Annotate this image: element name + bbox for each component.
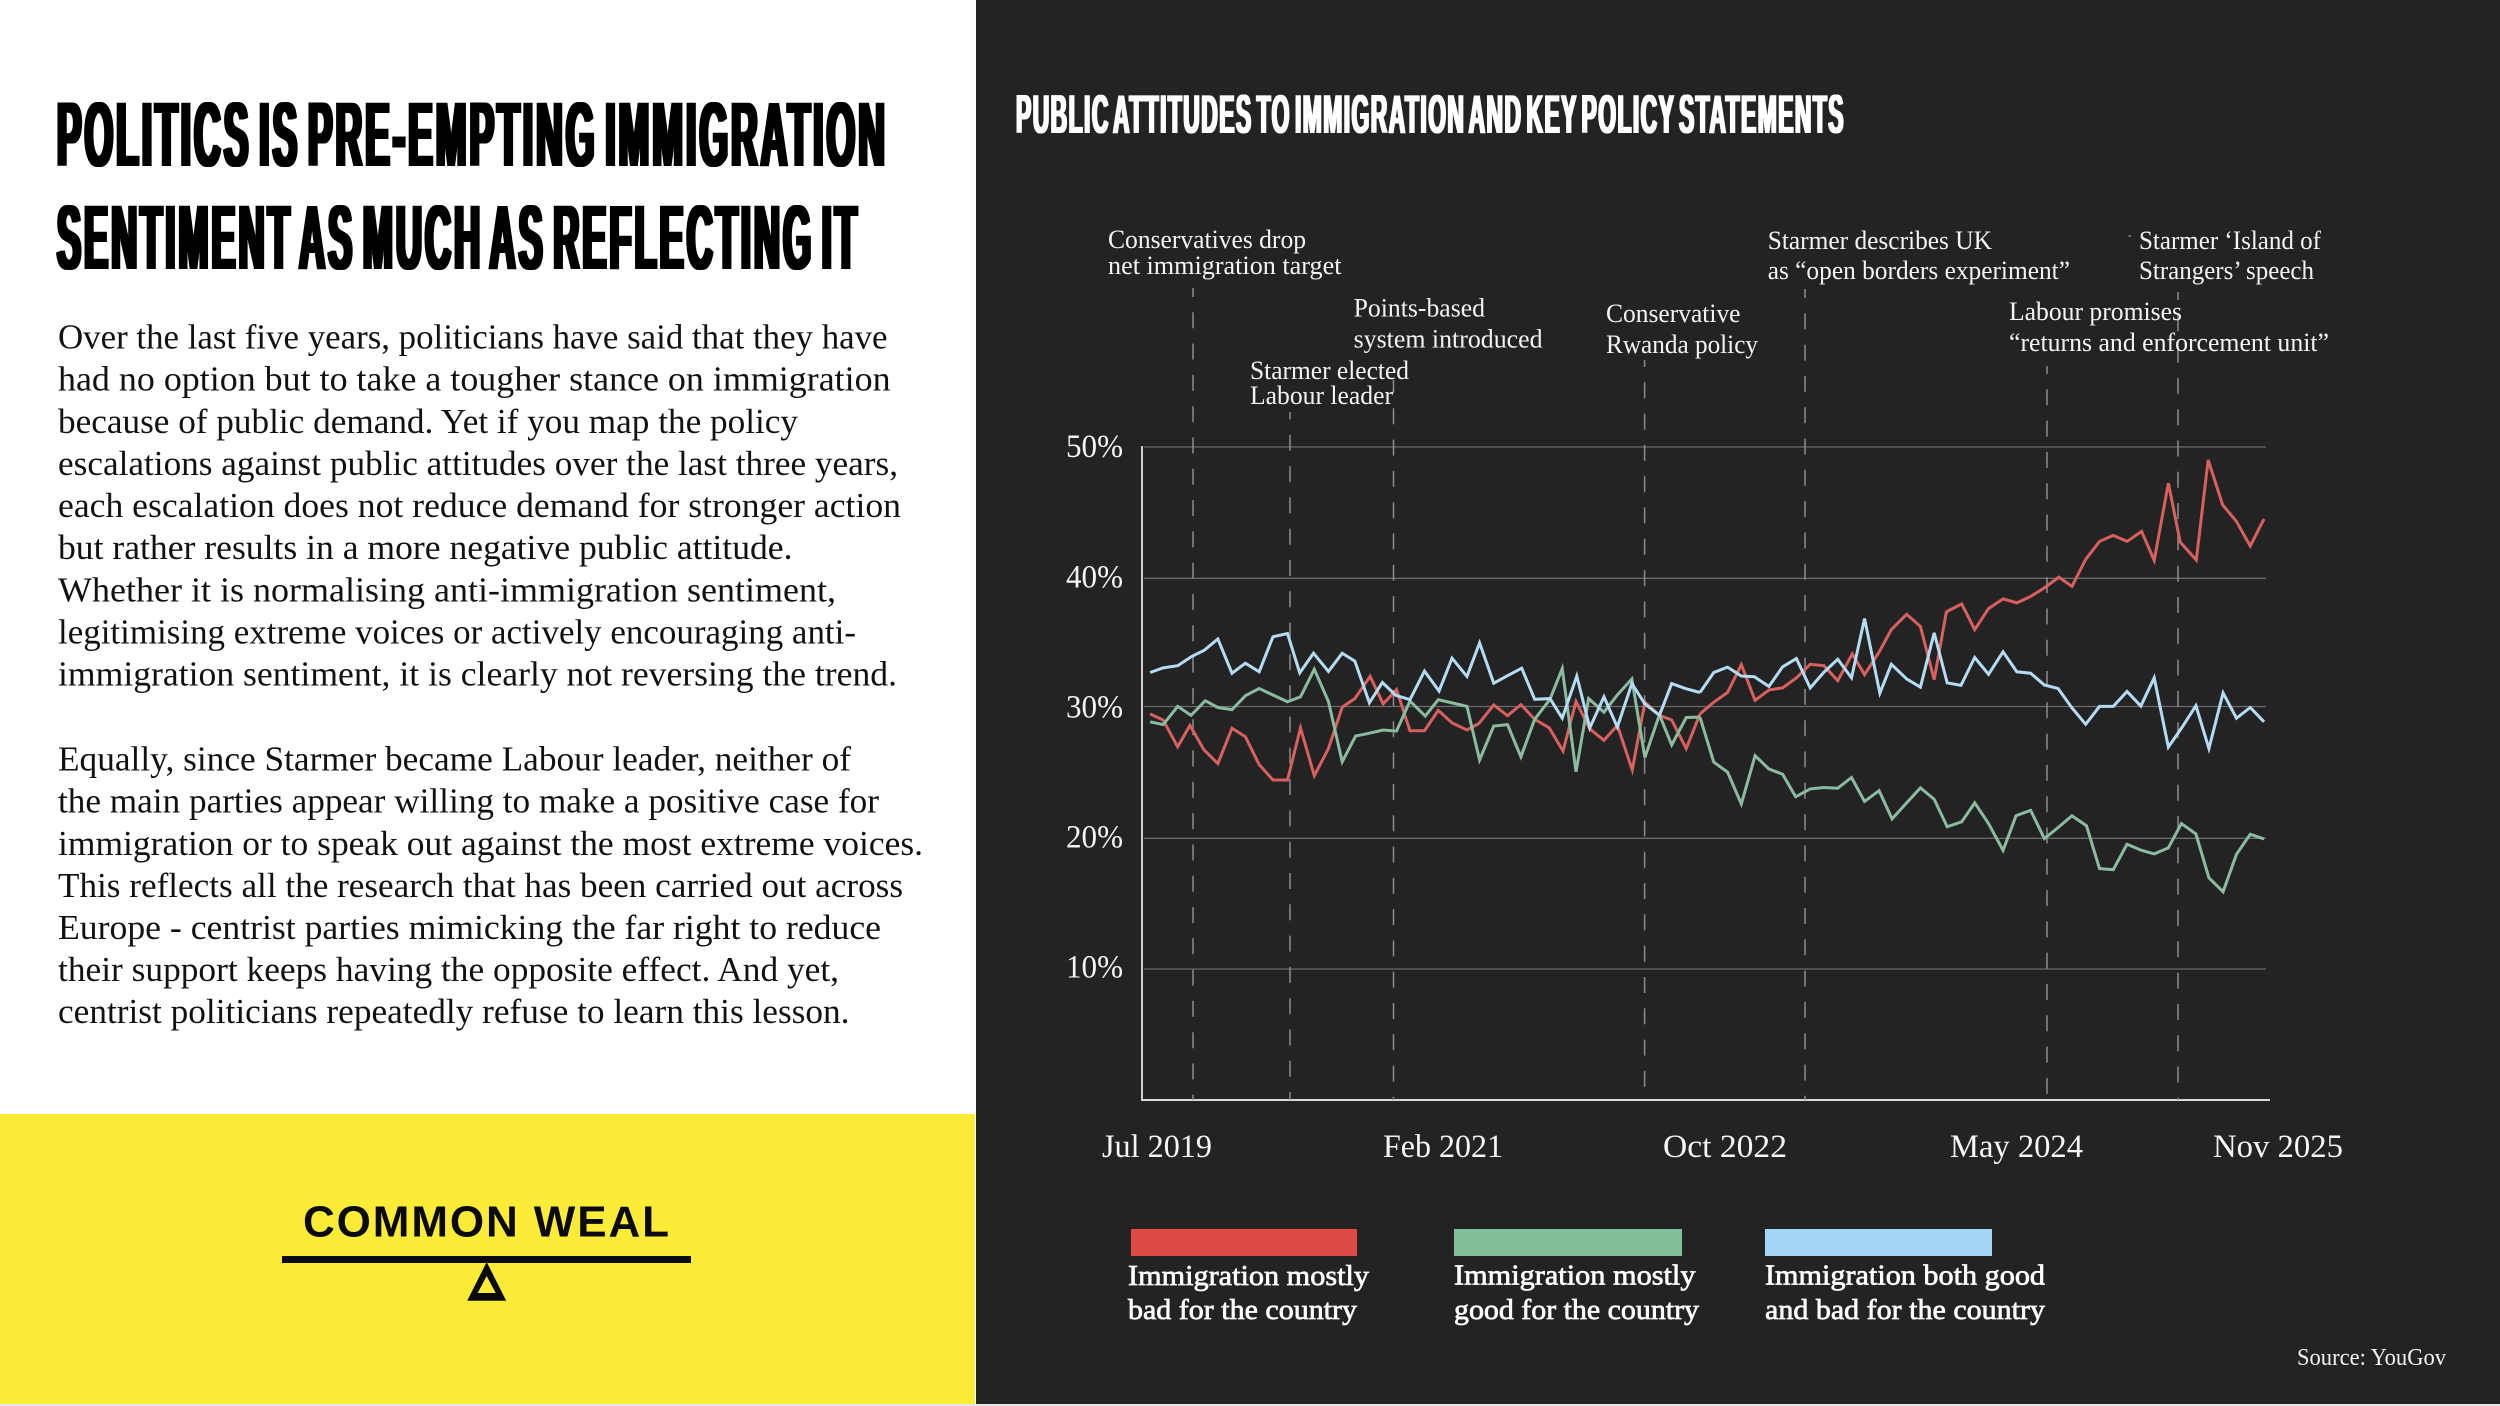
y axis gridlines and axes bbox=[1141, 446, 2270, 1101]
callout: Conservatives drop net immigration target: Conservatives drop bbox=[1108, 225, 1306, 254]
text: POLITICS IS PRE-EMPTING IMMIGRATION bbox=[57, 84, 888, 186]
callout: Conservatives drop net immigration target: net immigration target bbox=[1108, 251, 1342, 280]
callout: Conservative Rwanda policy: Conservative bbox=[1606, 299, 1740, 328]
callout: Starmer elected Labour leader: Starmer elected bbox=[1250, 356, 1409, 385]
text block: second paragraph: Europe - centrist parties mimicking the far right to reduce bbox=[58, 908, 881, 947]
callout: Conservatives drop net immigration target bbox=[1108, 225, 1342, 280]
text block: second paragraph: the main parties appear willing to make a positive case for bbox=[58, 782, 879, 821]
text block: second paragraph: centrist politicians repeatedly refuse to learn this lesson. bbox=[58, 992, 850, 1031]
callout: Starmer describes UK as open borders experiment bbox=[1768, 226, 2070, 285]
y axis labels: 40% bbox=[1066, 560, 1123, 596]
legend item: mostly bad: bad for the country bbox=[1128, 1294, 1358, 1326]
callout: Conservative Rwanda policy: Rwanda policy bbox=[1606, 330, 1758, 359]
text block: first paragraph: escalations against public attitudes over the last three years, bbox=[58, 444, 898, 483]
text block: first paragraph: but rather results in a more negative public attitude. bbox=[58, 528, 792, 567]
logo: Common Weal seesaw bbox=[282, 1198, 691, 1301]
x axis labels: Jul 2019 bbox=[1102, 1129, 1212, 1165]
text block: second paragraph: immigration or to speak out against the most extreme voices. bbox=[58, 824, 923, 863]
text block: first paragraph: had no option but to take a tougher stance on immigration bbox=[58, 360, 891, 399]
callout: Starmer Island of Strangers speech bbox=[2139, 226, 2321, 285]
legend bbox=[1128, 1229, 2046, 1326]
x axis labels: May 2024 bbox=[1950, 1129, 2083, 1165]
callout: Starmer Island of Strangers speech: Starmer ‘Island of bbox=[2139, 226, 2321, 255]
callout: Starmer describes UK as open borders experiment: Starmer describes UK bbox=[1768, 226, 1992, 255]
text block: second paragraph: Equally, since Starmer became Labour leader, neither of bbox=[58, 740, 851, 778]
callout: Labour promises returns and enforcement unit bbox=[2009, 297, 2329, 357]
panel: yellow logo footer bbox=[0, 1114, 975, 1406]
x axis labels bbox=[1102, 1129, 2343, 1165]
legend item: mostly good: Immigration mostly bbox=[1454, 1260, 1696, 1292]
x axis labels: Feb 2021 bbox=[1383, 1129, 1503, 1165]
text block: first paragraph: immigration sentiment, it is clearly not reversing the trend. bbox=[58, 654, 897, 694]
callout: Labour promises returns and enforcement unit: Labour promises bbox=[2009, 297, 2182, 326]
callout: Labour promises returns and enforcement unit: “returns and enforcement unit” bbox=[2009, 328, 2329, 357]
callout: Starmer elected Labour leader: Labour leader bbox=[1250, 381, 1393, 410]
y axis labels bbox=[1066, 429, 1123, 986]
text block: first paragraph: Whether it is normalising anti-immigration sentiment, bbox=[58, 570, 836, 609]
logo: Common Weal seesaw: COMMON WEAL bbox=[303, 1198, 669, 1246]
x axis labels: Nov 2025 bbox=[2213, 1129, 2343, 1165]
legend item: mostly good bbox=[1454, 1229, 1700, 1326]
text block: first paragraph: Over the last five years, politicians have said that they have bbox=[58, 318, 888, 356]
series: immigration both good and bad (blue) bbox=[1150, 619, 2264, 749]
callout: Points-based system introduced: Points-based bbox=[1354, 294, 1485, 323]
callout: Points-based system introduced: system introduced bbox=[1354, 325, 1543, 354]
series: immigration mostly bad (red) bbox=[1150, 460, 2264, 780]
legend item: both good and bad: and bad for the country bbox=[1765, 1294, 2046, 1326]
panel: dark chart background bbox=[976, 0, 2500, 1404]
y axis labels: 50% bbox=[1066, 429, 1123, 465]
text block: second paragraph bbox=[58, 740, 923, 1031]
panel: white text column bbox=[0, 0, 976, 1114]
callout: Starmer elected Labour leader bbox=[1250, 356, 1409, 410]
text block: second paragraph: their support keeps having the opposite effect. And yet, bbox=[58, 950, 839, 989]
legend item: both good and bad bbox=[1765, 1229, 2046, 1326]
text block: first paragraph bbox=[58, 318, 901, 694]
callout: Points-based system introduced bbox=[1354, 294, 1543, 354]
source note: Source: YouGov bbox=[2297, 1345, 2446, 1371]
y axis labels: 30% bbox=[1066, 690, 1123, 726]
legend item: both good and bad: Immigration both good bbox=[1765, 1260, 2046, 1292]
main heading bbox=[57, 84, 888, 289]
text block: first paragraph: because of public demand. Yet if you map the policy bbox=[58, 402, 798, 441]
legend item: mostly bad: Immigration mostly bbox=[1128, 1260, 1370, 1292]
legend item: mostly bad bbox=[1128, 1229, 1370, 1326]
line chart bbox=[1066, 236, 2343, 1165]
callout: Starmer describes UK as open borders experiment: as “open borders experiment” bbox=[1768, 256, 2070, 285]
x axis labels: Oct 2022 bbox=[1663, 1129, 1787, 1165]
callout: Conservative Rwanda policy bbox=[1606, 299, 1758, 359]
text block: first paragraph: each escalation does not reduce demand for stronger action bbox=[58, 486, 901, 525]
callout: Starmer Island of Strangers speech: Strangers’ speech bbox=[2139, 256, 2314, 285]
y axis labels: 20% bbox=[1066, 820, 1123, 856]
y axis labels: 10% bbox=[1066, 950, 1123, 986]
text block: second paragraph: This reflects all the research that has been carried out across bbox=[58, 866, 903, 905]
text block: first paragraph: legitimising extreme voices or actively encouraging anti- bbox=[58, 612, 856, 651]
event marker dashed lines bbox=[1193, 236, 2178, 1100]
text: SENTIMENT AS MUCH AS REFLECTING IT bbox=[57, 187, 860, 289]
series: immigration mostly good (green) bbox=[1150, 669, 2264, 892]
legend item: mostly good: good for the country bbox=[1454, 1294, 1700, 1326]
